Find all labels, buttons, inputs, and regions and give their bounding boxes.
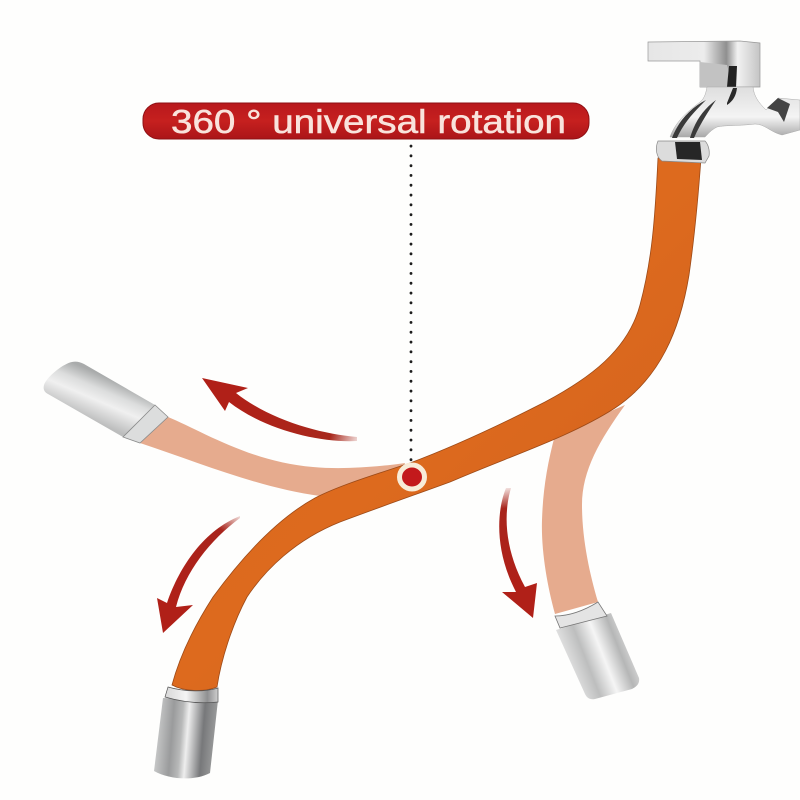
- arrow: lower left: [157, 516, 240, 633]
- ghost nozzle: right: [555, 602, 639, 699]
- arrow: upper left: [202, 378, 357, 441]
- faucet spout: [670, 87, 800, 137]
- nozzle: main position: [154, 687, 218, 778]
- main orange hose: [172, 158, 701, 691]
- ghost hose: raised left position: [44, 362, 405, 496]
- faucet hex nut: [656, 141, 709, 163]
- rotation joint marker: [400, 465, 424, 489]
- ghost hose: lowered right position: [542, 405, 639, 699]
- dotted leader line: [410, 146, 412, 460]
- ghost nozzle: left: [44, 362, 168, 443]
- arrow: lower right: [499, 488, 537, 618]
- faucet handle: [648, 41, 760, 87]
- faucet: [648, 41, 800, 163]
- label: 360 universal rotation: 360 ° universal rotation: [171, 103, 566, 140]
